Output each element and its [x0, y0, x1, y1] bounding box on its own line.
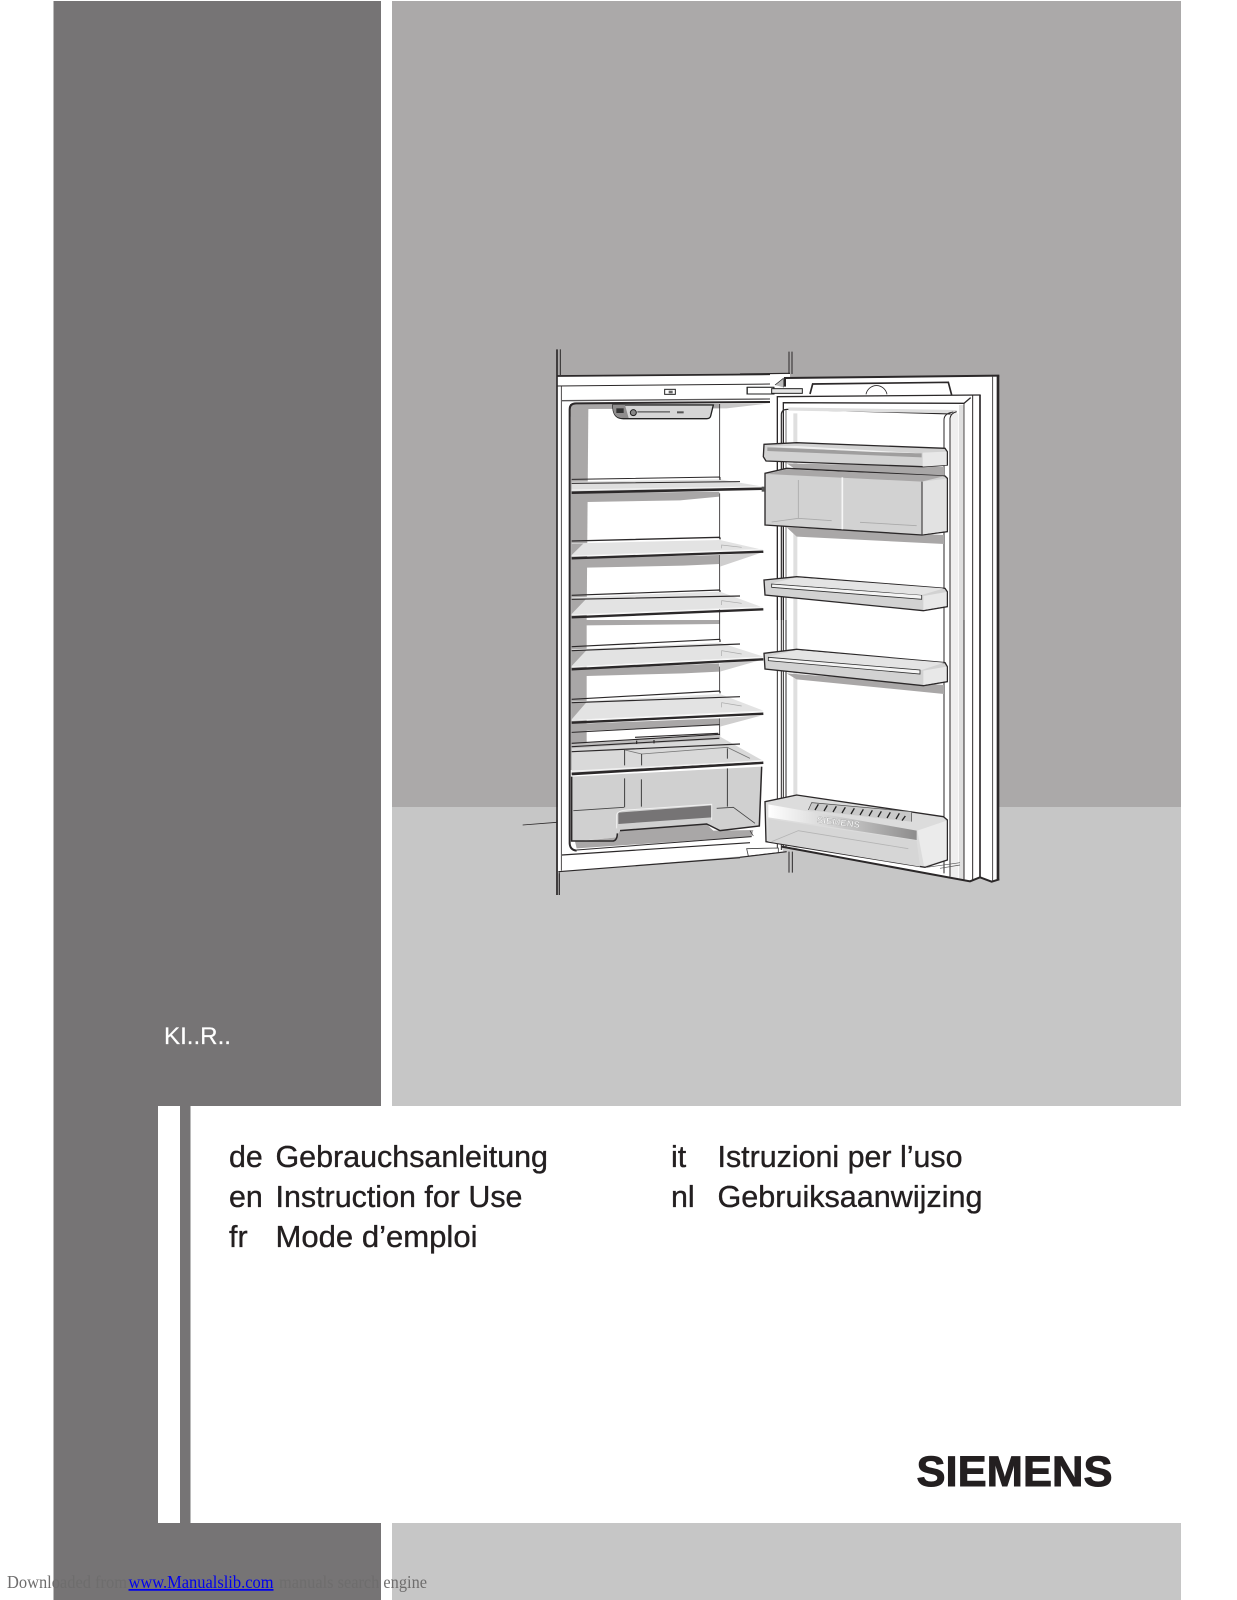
- language list: left column: Mode d’emploi: [276, 1220, 478, 1254]
- cabinet bottom lines: [558, 843, 770, 872]
- language list: left column: en: [229, 1180, 263, 1214]
- fridge body backing: [557, 374, 790, 872]
- footer download line: manuals search engine: [279, 1572, 427, 1592]
- language list: right column: Gebruiksaanwijzing: [718, 1180, 982, 1214]
- language list: right column: nl: [671, 1180, 695, 1214]
- lower rail: [572, 725, 719, 732]
- shelf 3: [572, 590, 763, 617]
- illustration: open built-in refrigerator: [523, 349, 999, 895]
- door frame continued: [777, 620, 998, 882]
- shadow below shelf 3: [572, 620, 719, 625]
- cabinet outline lines: [557, 349, 770, 620]
- shelf 1: [572, 477, 764, 502]
- language list: left column: de: [229, 1140, 263, 1174]
- Siemens logo: SIEMENS: [916, 1448, 1112, 1496]
- door frame: [777, 395, 981, 620]
- shelf 5: [572, 691, 763, 731]
- language list: left column: Instruction for Use: [276, 1180, 522, 1214]
- left wall shadow continued: [571, 620, 587, 770]
- shelf 2: [572, 537, 763, 568]
- hinge bottom: [740, 848, 792, 873]
- left wall shadow: [571, 405, 588, 620]
- crisper drawer: [572, 733, 763, 850]
- door shelf 1: [763, 443, 947, 476]
- cabinet lines continued: [523, 620, 720, 895]
- language list: left column: Gebrauchsanleitung: [276, 1140, 548, 1174]
- language list: left column: fr: [229, 1220, 248, 1254]
- top wall shadow: [570, 404, 720, 417]
- door balcony box: [765, 468, 947, 544]
- panel: lower floor background: [392, 807, 1181, 1106]
- door shelf 2: [764, 577, 947, 611]
- door bottom bin: SIEMENS: [816, 815, 861, 830]
- footer download line: www.Manualslib.com: [128, 1572, 274, 1592]
- cabinet lower part: [523, 620, 787, 895]
- refrigerator door upper part: [740, 352, 999, 620]
- language list: left column: [229, 1140, 548, 1254]
- interior light sensor: [665, 389, 675, 394]
- footer download line: Downloaded from: [7, 1572, 127, 1592]
- bottom grey plinth: [559, 857, 787, 895]
- language list: right column: [671, 1140, 982, 1214]
- control panel: [613, 405, 713, 419]
- footer download line: [7, 1572, 427, 1592]
- door bottom bin: [765, 795, 947, 867]
- language list: right column: it: [671, 1140, 687, 1174]
- shelf 4: [572, 639, 763, 676]
- door backing: [782, 376, 998, 881]
- panel: white title area: [158, 1106, 1181, 1523]
- top grip strip: [810, 382, 952, 395]
- door bottom outline: [782, 847, 999, 882]
- panel: bottom grey strip: [392, 1523, 1181, 1600]
- cabinet upper part: [557, 349, 774, 620]
- refrigerator door lower part: [740, 620, 999, 890]
- door shelf 3: [764, 649, 947, 694]
- upper hinge and top edge: [740, 352, 999, 620]
- language list: right column: Istruzioni per l’uso: [718, 1140, 962, 1174]
- door bottom cover grey area: [740, 847, 999, 890]
- model number: KI..R..: [164, 1024, 231, 1050]
- panel: dark grey column: [54, 1, 381, 1600]
- panel: upper wall background: [392, 1, 1181, 807]
- hinge plate: [747, 387, 774, 394]
